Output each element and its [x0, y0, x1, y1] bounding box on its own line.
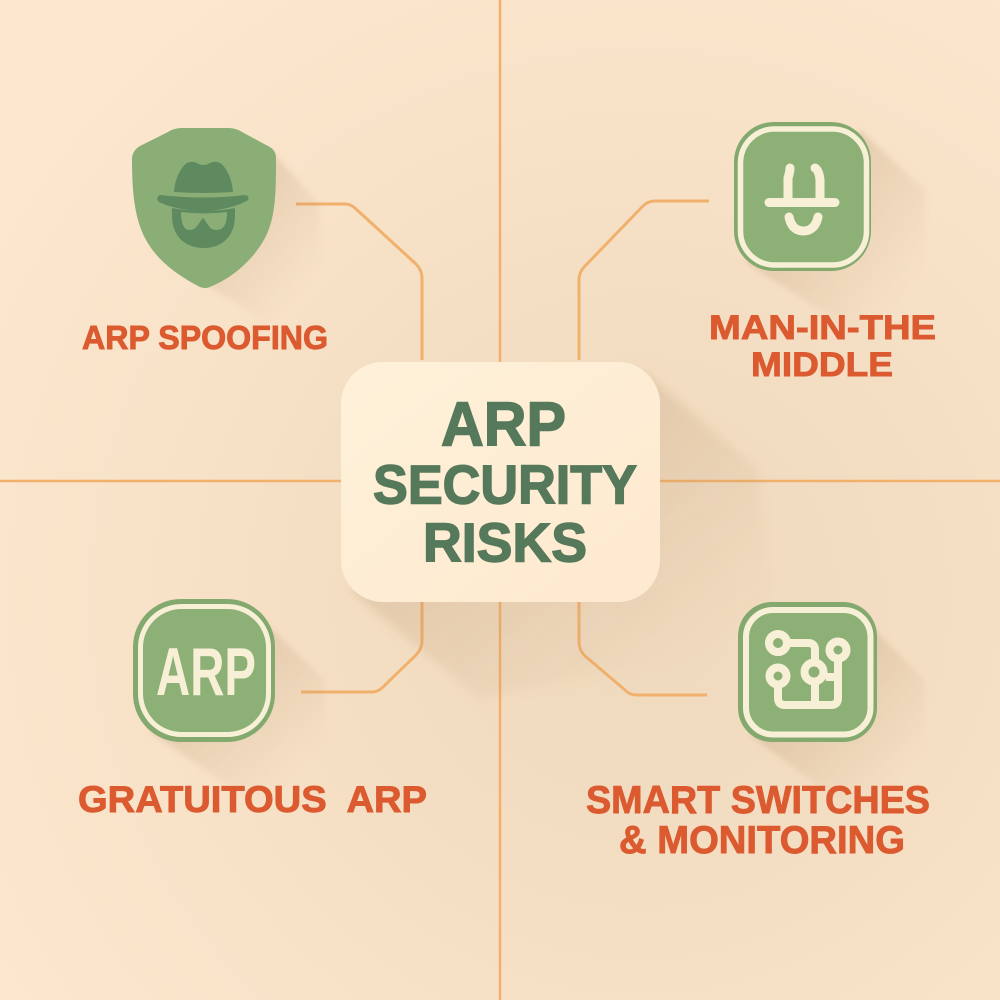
icon shadow: plug	[745, 130, 925, 330]
icon shadow: circuit	[750, 620, 925, 810]
label: man in the middle: MIDDLE	[751, 346, 893, 384]
panel: man in the middle	[709, 122, 936, 384]
title	[373, 390, 637, 574]
icon shadow: ARP	[150, 620, 325, 800]
label: smart switches	[586, 779, 930, 862]
title: RISKS	[423, 512, 587, 574]
label: man in the middle: MAN-IN-THE	[709, 309, 936, 347]
icon: circuit	[738, 602, 877, 742]
panel: center title	[341, 362, 770, 700]
icon: shield with spy	[132, 128, 276, 288]
label: smart switches: & MONITORING	[619, 819, 905, 862]
card	[341, 362, 660, 602]
icon: ARP badge	[133, 599, 275, 742]
label: man in the middle	[709, 309, 936, 384]
title: SECURITY	[373, 454, 637, 516]
spy hat and face	[157, 162, 249, 248]
panel: ARP spoofing	[82, 128, 328, 356]
label: gratuitous ARP: GRATUITOUS ARP	[78, 779, 427, 820]
icon: ARP badge: ARP	[156, 634, 256, 710]
label: ARP spoofing: ARP SPOOFING	[82, 319, 328, 356]
label: smart switches: SMART SWITCHES	[586, 779, 930, 822]
card shadow	[350, 372, 770, 700]
panel: smart switches	[586, 602, 930, 862]
panel: gratuitous ARP	[78, 599, 427, 820]
icon shadow: shield	[180, 150, 320, 320]
title: ARP	[441, 390, 566, 460]
icon: plug	[734, 122, 871, 271]
